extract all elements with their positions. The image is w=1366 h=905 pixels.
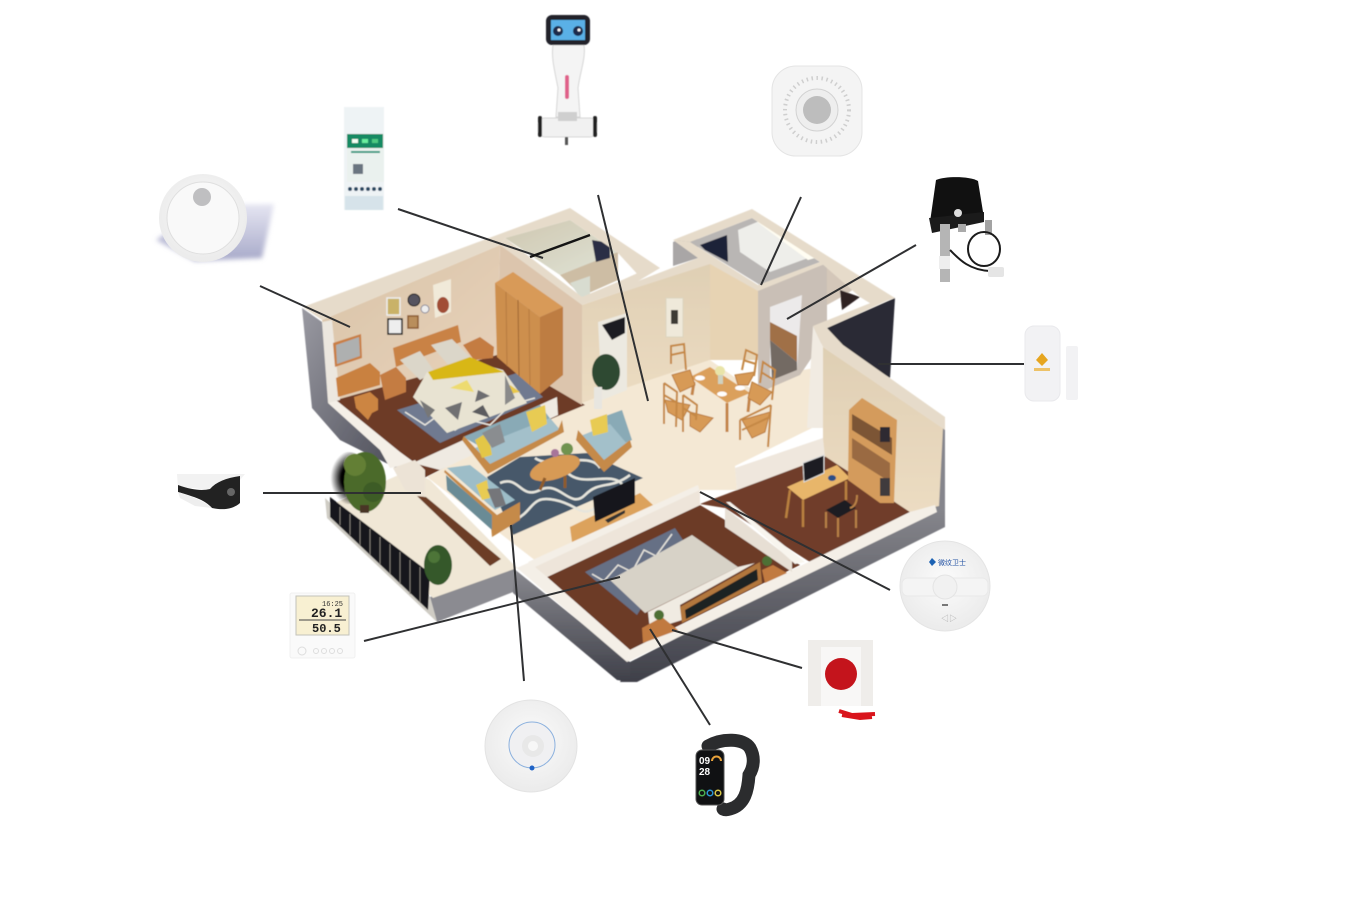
dresser and stool — [336, 363, 380, 397]
room: kitchen — [690, 218, 820, 285]
wall: low white partition — [535, 490, 700, 577]
icon: water leak sensor: 微纹卫士 — [938, 558, 966, 567]
line: door sensor — [878, 363, 1024, 365]
floor: study — [700, 453, 910, 562]
sofa: back — [462, 405, 564, 474]
headboard — [393, 325, 461, 367]
line: smoke detector — [260, 286, 350, 327]
icon: water leak sensor: ◁▷ — [941, 614, 957, 623]
line: robot — [598, 195, 648, 401]
balcony: dark backdrop — [326, 452, 370, 504]
icon: gas detector — [772, 66, 862, 156]
quilt — [413, 360, 527, 433]
line: ceiling sensor — [511, 525, 524, 681]
floor: balcony — [330, 470, 517, 598]
line: wristband — [650, 629, 710, 725]
icon: din power meter — [344, 107, 384, 210]
icon: thermo-hygrometer — [290, 593, 355, 658]
icon: door sensor — [1025, 326, 1078, 401]
floor: threshold strip — [417, 496, 501, 566]
wall: first bedroom side — [497, 245, 582, 405]
sofa: front — [444, 465, 520, 537]
pillows — [400, 351, 435, 380]
plant: balcony — [424, 545, 452, 585]
wall: dining back — [582, 262, 710, 403]
balcony: railing — [330, 497, 430, 610]
line: camera — [263, 492, 421, 494]
wall: dark exterior block — [827, 298, 895, 378]
floor: second bedroom — [547, 505, 800, 650]
tree — [344, 452, 386, 513]
wall: end cap — [807, 326, 823, 428]
icon: water leak sensor — [900, 541, 990, 631]
connector lines — [260, 195, 1024, 725]
living room rug — [487, 453, 643, 535]
icon: smart wristband: 28 — [699, 767, 711, 778]
exterior walls — [302, 232, 945, 682]
room: bathroom — [505, 220, 618, 300]
floor plan: 3D apartment model — [302, 208, 945, 682]
line: power meter — [398, 209, 543, 258]
wall: kitchen divider with doorway — [758, 262, 860, 395]
first bedroom furniture — [333, 272, 563, 443]
mirror — [333, 334, 362, 367]
nightstands — [380, 367, 406, 400]
icon: valve actuator — [929, 177, 1004, 282]
icon: smart wristband: 09 — [699, 756, 711, 767]
wall: partition behind sofa — [413, 397, 558, 470]
icon: thermo-hygrometer: 26.1 — [311, 606, 342, 621]
wall: study low partition — [735, 438, 825, 490]
wall: dining side — [710, 262, 758, 360]
icon: thermo-hygrometer: 16:25 — [322, 601, 343, 609]
potted plant: doorway — [592, 354, 620, 409]
low wall tops: white — [328, 400, 937, 662]
rug — [397, 373, 543, 443]
side-wall end cap — [322, 320, 340, 403]
wall: bedroom divider — [725, 502, 805, 572]
icon: security camera — [177, 474, 245, 509]
second bedroom furniture — [585, 528, 787, 643]
icon: thermo-hygrometer: 50.5 — [312, 622, 341, 636]
icon: ceiling sensor — [485, 700, 577, 792]
coffee table — [527, 443, 583, 490]
tv set — [570, 478, 653, 542]
icon: robot — [538, 15, 597, 145]
line: gas detector — [761, 197, 801, 285]
icon: smoke detector — [156, 174, 274, 262]
wall art: dining — [666, 298, 683, 337]
sofa: right — [576, 410, 632, 472]
line: valve — [787, 245, 916, 319]
entry wall stub — [393, 460, 425, 497]
icon: smart wristband — [696, 740, 753, 810]
floor: living and dining room — [427, 360, 815, 568]
line: thermometer — [364, 577, 620, 641]
line: water sensor — [700, 492, 890, 590]
line: panic button — [672, 630, 802, 668]
bedroom door — [598, 313, 627, 400]
study furniture — [786, 398, 897, 537]
wall: study side — [823, 347, 943, 512]
icon: panic button — [808, 640, 875, 718]
dining set — [664, 344, 775, 447]
yellow throw — [428, 357, 504, 380]
wardrobe — [495, 272, 563, 317]
line: shower rail — [530, 235, 590, 257]
floor: first bedroom — [335, 353, 585, 480]
wall tops — [303, 208, 945, 430]
frames — [387, 298, 400, 315]
wall: first bedroom back — [322, 245, 500, 400]
